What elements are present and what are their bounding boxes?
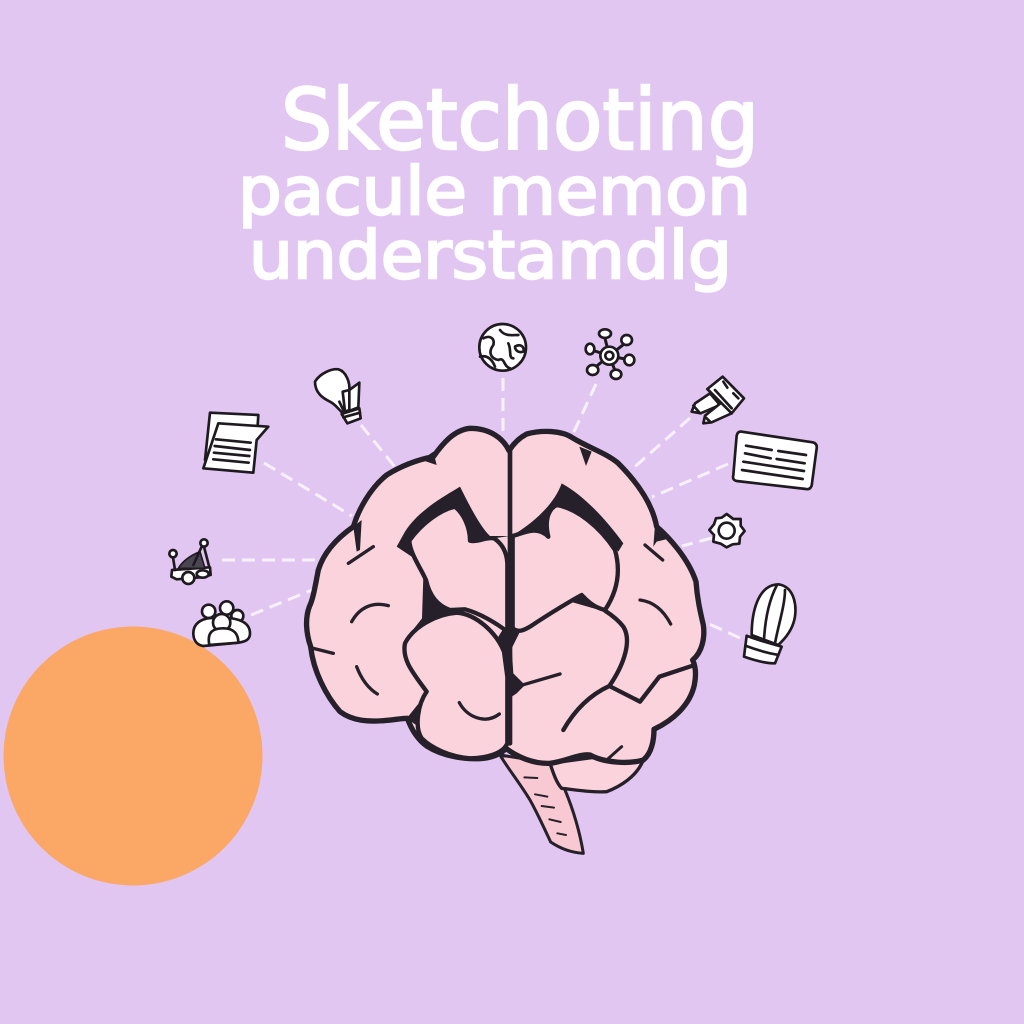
icon: rover (169, 539, 211, 584)
right icons (479, 324, 817, 663)
icon: people group (193, 601, 250, 646)
cerebellum (550, 753, 643, 792)
title (238, 71, 759, 294)
left icons (169, 369, 361, 646)
orange circle (4, 626, 262, 886)
icon: virus molecule (586, 329, 634, 379)
icon: globe (479, 324, 526, 371)
title: understamdlg (249, 217, 732, 294)
black wedges between lobes (353, 447, 670, 727)
icon: light bulb (315, 369, 361, 423)
icon: rocket pencils (692, 377, 744, 423)
icon: gear (709, 514, 745, 547)
icon: text card (733, 432, 817, 489)
dashed connector lines (222, 378, 740, 638)
cerebrum outline (307, 428, 704, 763)
sulci lines (313, 450, 692, 835)
brain (307, 428, 704, 853)
brain stem (500, 755, 583, 853)
icon: document (203, 413, 268, 473)
title: pacule memon (238, 153, 751, 230)
icon: capsule bulb (744, 584, 795, 663)
title: Sketchoting (281, 71, 759, 169)
inner lobes (404, 505, 618, 758)
